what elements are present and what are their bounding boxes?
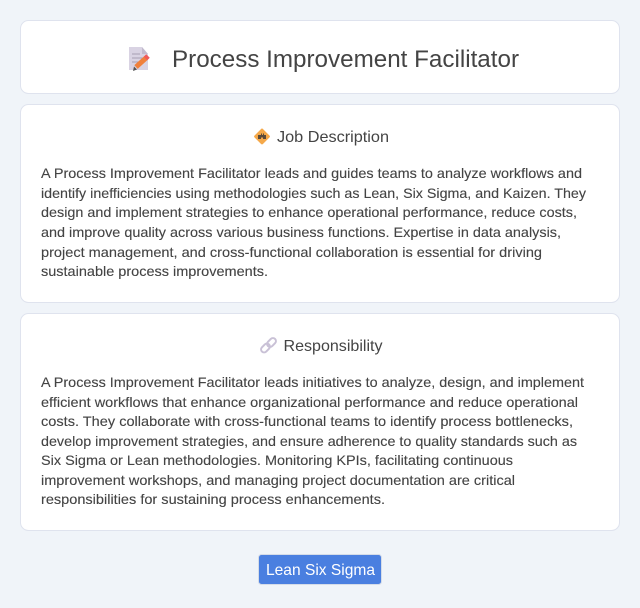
heading: responsibility: Responsibility [284,338,382,355]
panel: job description [20,104,620,302]
job description text: identify inefficiencies using methodologies such as Lean, Six Sigma, and Kaizen. They [41,185,586,201]
responsibility text: improvement workshops, and managing project documentation are critical [41,472,515,488]
responsibility text [41,374,584,507]
job description text: project management, and cross-functional collaboration is essential for driving [41,244,542,260]
button: Lean Six Sigma [258,554,382,584]
job description text: A Process Improvement Facilitator leads and guides teams to analyze workflows and [41,165,582,181]
icon: orange diamond [254,128,270,145]
responsibility text: develop improvement strategies, and ensure adherence to quality standards such as [41,433,577,449]
job description text: design and implement strategies to enhance operational performance, reduce costs, [41,204,577,220]
job description text: sustainable process improvements. [41,263,268,279]
title text: Process Improvement Facilitator [172,46,519,73]
responsibility text: costs. They collaborate with cross-functional teams to identify process bottlenecks, [41,413,573,429]
heading: job description: Job Description [277,129,389,146]
job description text: and improve quality across various business functions. Expertise in data analysis, [41,224,561,240]
button: Lean Six Sigma: Lean Six Sigma [266,562,375,579]
icon: document with pencil [129,47,148,71]
responsibility text: efficient workflows that enhance organizational performance and reduce operational [41,394,578,410]
job description text [41,165,586,279]
icon: chain link [260,337,277,354]
panel: title [20,20,620,94]
panel: responsibility [20,314,620,530]
responsibility text: responsibilities for sustaining process enhancements. [41,491,385,507]
responsibility text: Six Sigma or Lean methodologies. Monitoring KPIs, facilitating continuous [41,452,513,468]
responsibility text: A Process Improvement Facilitator leads initiatives to analyze, design, and implement [41,374,584,390]
